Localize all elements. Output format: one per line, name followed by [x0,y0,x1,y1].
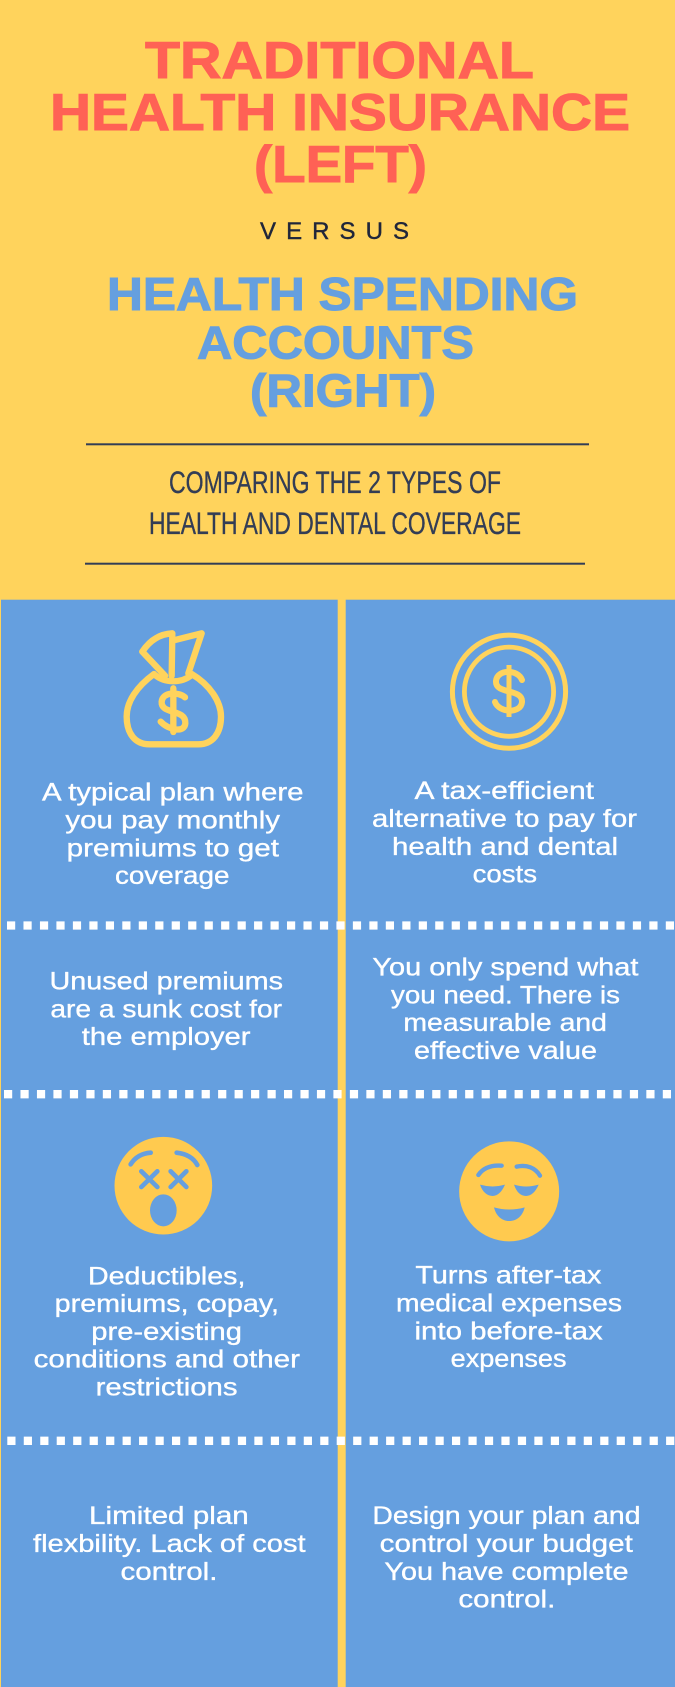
text: design your plan: Design your plan and [372,1502,640,1530]
text: after-tax to before-tax: Turns after-tax [415,1262,602,1290]
text: deductibles: restrictions [96,1374,238,1402]
title: traditional health insurance [50,32,630,194]
text: tax-efficient: alternative to pay for [372,805,637,833]
text: tax-efficient [372,777,637,889]
text: spend what you need: you need. There is [391,981,620,1009]
text: design your plan: control. [458,1586,555,1614]
text: typical plan: A typical plan where [42,779,304,807]
text: tax-efficient: costs [473,861,537,889]
text: deductibles: premiums, copay, [55,1290,279,1318]
text: typical plan: you pay monthly [65,807,281,835]
title: traditional health insurance: HEALTH INSURANCE [50,84,630,142]
text: spend what you need [372,954,638,1065]
icon: dizzy face [114,1137,212,1234]
text: design your plan: You have complete [384,1558,628,1586]
text: typical plan: coverage [115,862,230,890]
panel: health spending accounts column [346,600,675,1687]
text: spend what you need: You only spend what [372,954,638,982]
text: sunk cost [50,967,283,1051]
icon: content face [459,1141,559,1241]
text: spend what you need: measurable and [403,1009,607,1037]
text: deductibles: conditions and other [34,1346,300,1374]
text: design your plan [372,1502,640,1614]
title: health spending accounts: (RIGHT) [250,364,436,416]
text: deductibles: Deductibles, [88,1262,245,1290]
text: after-tax to before-tax: medical expenses [396,1290,622,1318]
text: design your plan: control your budget [380,1530,633,1558]
text: limited flexibility: flexbility. Lack of cost [33,1530,306,1558]
versus label: VERSUS [260,218,409,245]
subtitle: COMPARING THE 2 TYPES OF [169,464,501,500]
text: limited flexibility: control. [120,1558,217,1586]
text: tax-efficient: A tax-efficient [414,777,594,805]
title: health spending accounts: HEALTH SPENDING [107,268,578,320]
text: sunk cost: the employer [82,1023,250,1051]
panel: traditional insurance column [1,600,338,1687]
text: after-tax to before-tax: expenses [451,1345,566,1373]
text: sunk cost: are a sunk cost for [50,995,282,1023]
title: traditional health insurance: (LEFT) [254,136,427,194]
text: after-tax to before-tax [396,1262,622,1373]
text: limited flexibility: Limited plan [89,1502,249,1530]
text: sunk cost: Unused premiums [50,967,283,995]
title: health spending accounts [107,268,578,416]
text: spend what you need: effective value [414,1037,597,1065]
text: typical plan [42,779,304,890]
text: tax-efficient: health and dental [392,833,618,861]
text: typical plan: premiums to get [67,835,279,863]
icon: dollar coin [452,635,566,748]
subtitle: HEALTH AND DENTAL COVERAGE [149,505,521,541]
title: health spending accounts: ACCOUNTS [197,317,474,369]
text: deductibles: pre-existing [91,1318,242,1346]
text: limited flexibility [33,1502,306,1586]
title: traditional health insurance: TRADITIONAL [145,32,534,90]
icon: money bag [127,633,221,744]
text: deductibles [34,1262,300,1402]
subtitle [149,464,521,541]
text: after-tax to before-tax: into before-tax [414,1317,603,1345]
